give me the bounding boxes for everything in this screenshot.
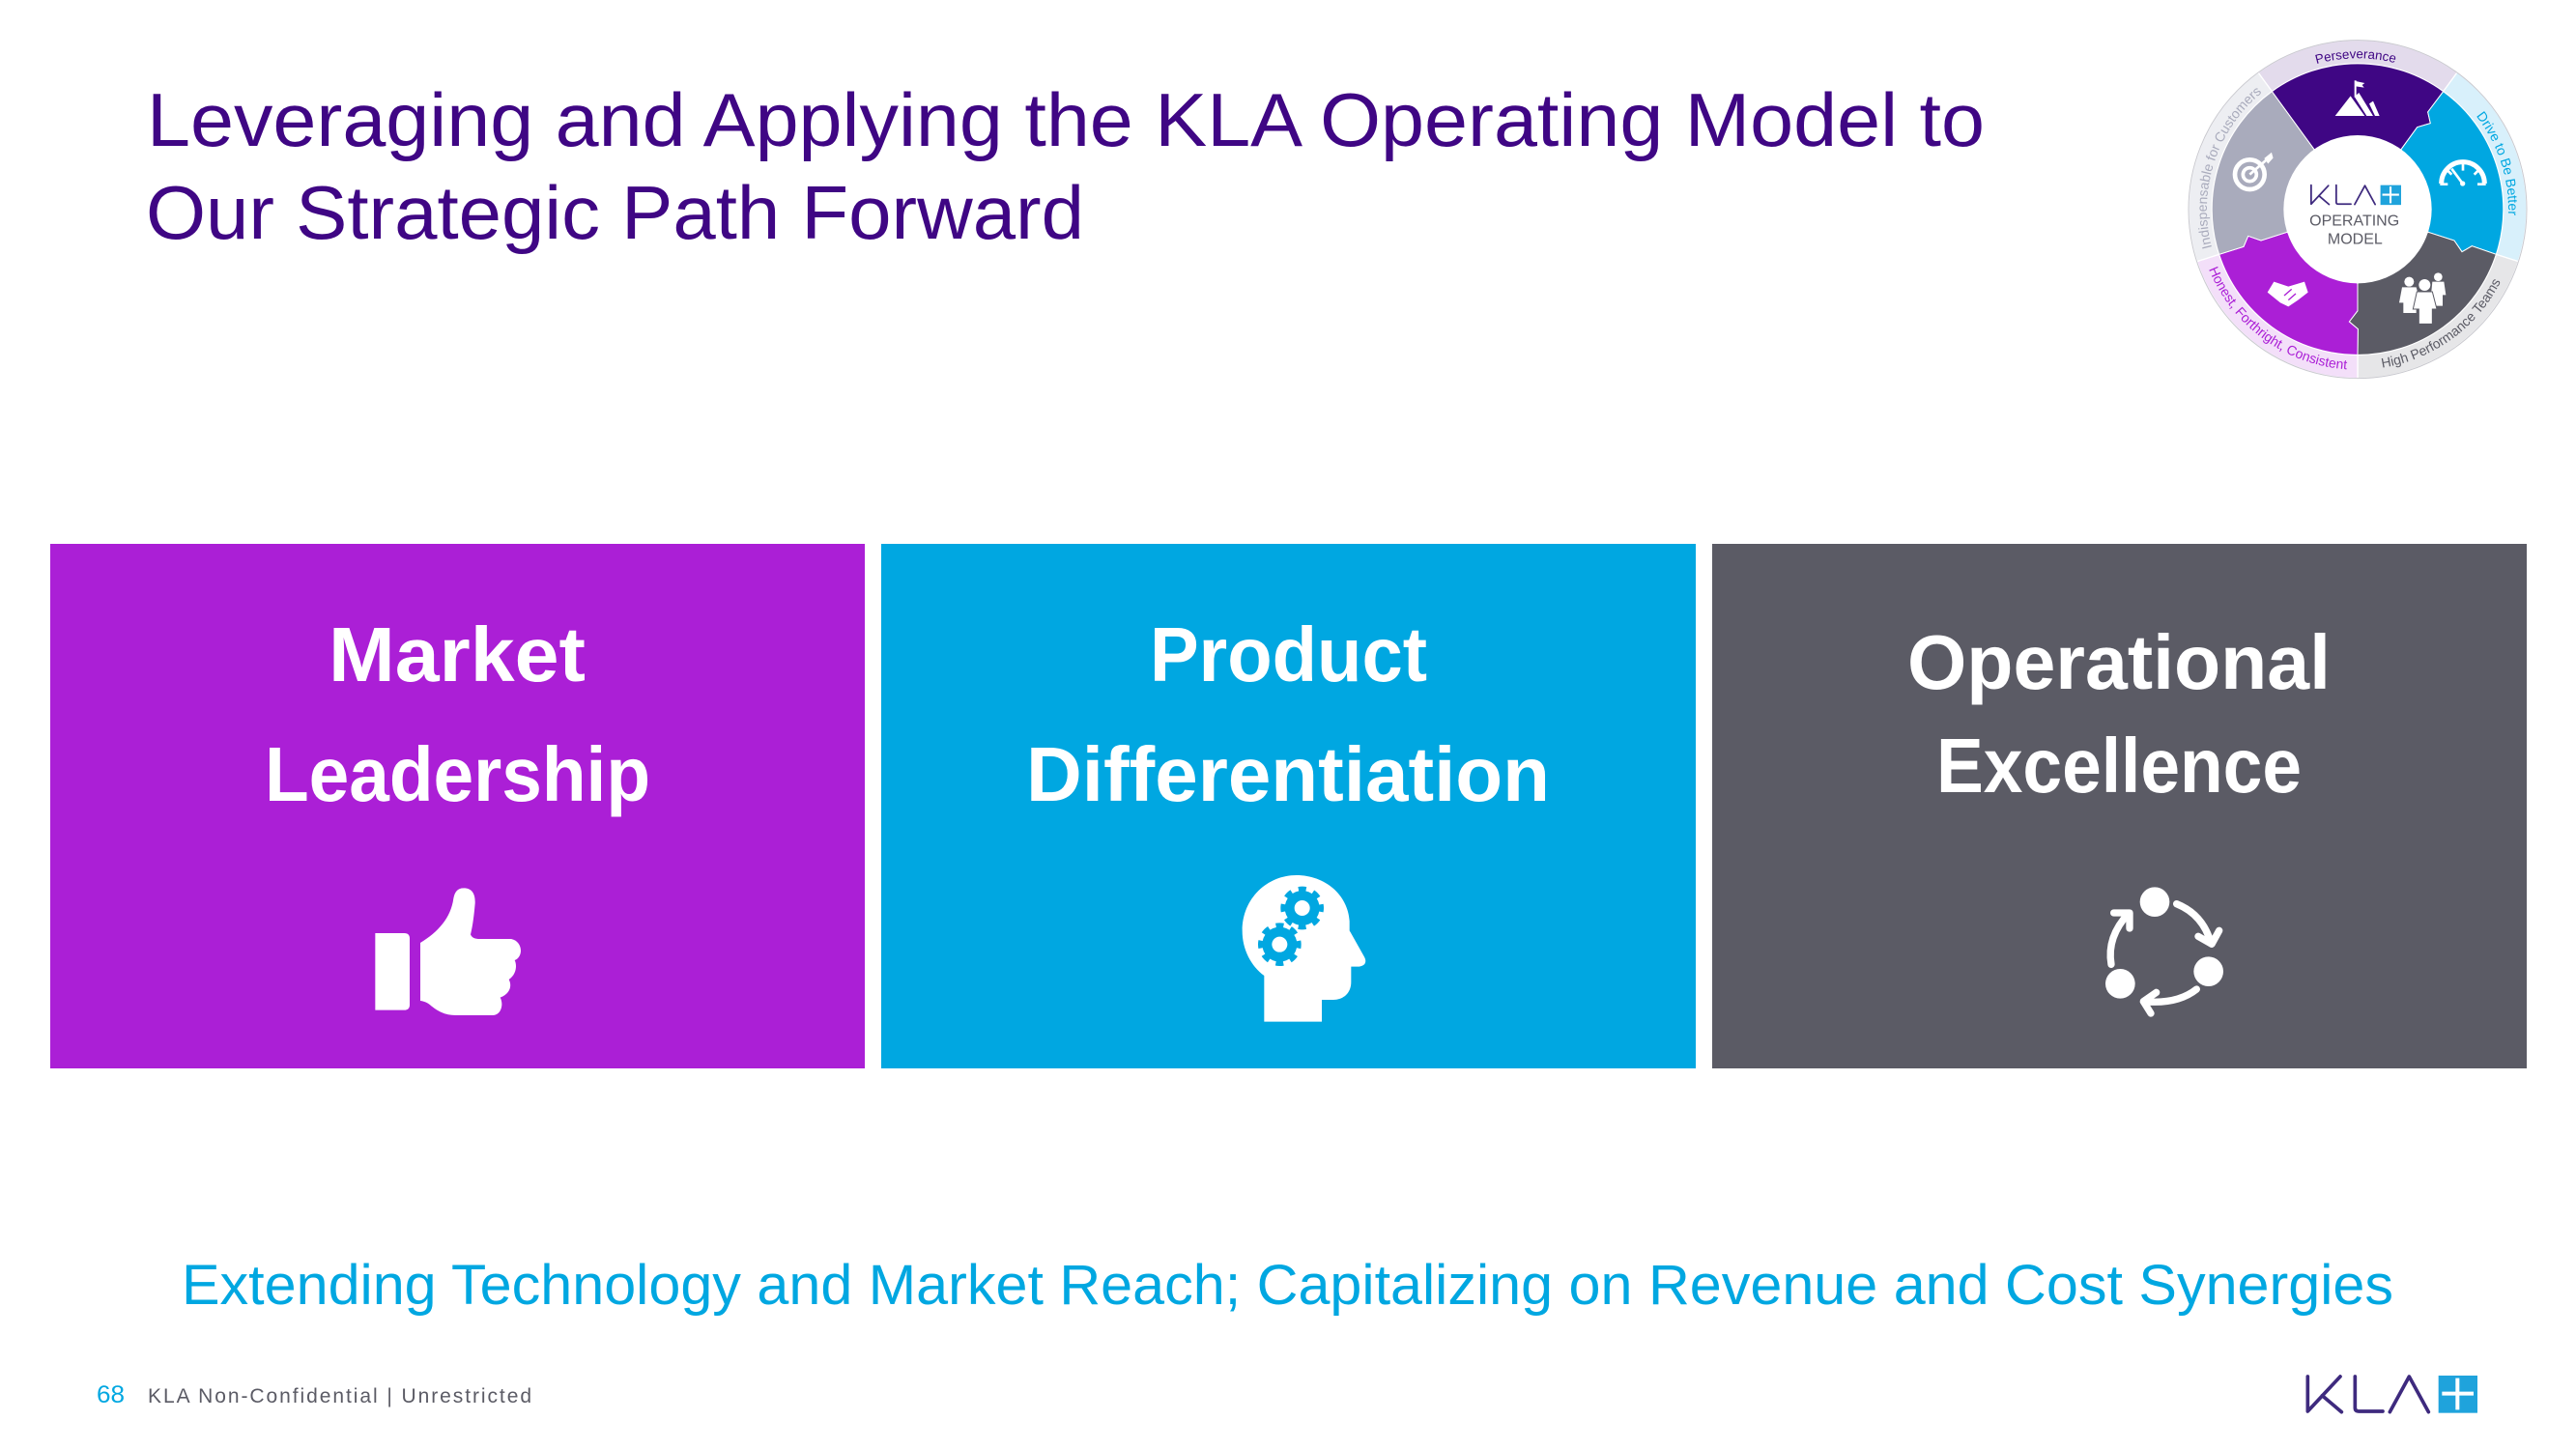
heading: operational excellence: Operational xyxy=(1907,619,2331,705)
title: Our Strategic Path Forward xyxy=(146,170,1084,255)
subtitle: Extending Technology and Market Reach; Capitalizing on Revenue and Cost Synergies xyxy=(182,1254,2393,1317)
page number: 68 xyxy=(97,1381,125,1408)
wheel center text xyxy=(2309,213,2399,248)
heading: operational excellence: Excellence xyxy=(1936,723,2302,809)
wheel center text: MODEL xyxy=(2328,232,2383,248)
icon: people xyxy=(2399,272,2446,324)
logo: KLA xyxy=(2307,1376,2477,1413)
heading: market leadership: Market xyxy=(329,611,586,697)
heading: market leadership xyxy=(265,611,650,817)
icon: gauge xyxy=(2440,162,2486,186)
ring outline xyxy=(2189,41,2527,379)
sector: honest xyxy=(2219,232,2358,355)
wheel center text: OPERATING xyxy=(2309,213,2399,230)
icon: cycle xyxy=(2105,887,2223,1013)
icon: head with gears xyxy=(1243,875,1365,1022)
panel: operational excellence xyxy=(1712,544,2527,1068)
heading: market leadership: Leadership xyxy=(265,731,650,817)
ring: honest forthright consistent xyxy=(2197,254,2358,379)
ring labels xyxy=(2198,51,2517,369)
heading: product differentiation xyxy=(1026,611,1550,817)
title: Leveraging and Applying the KLA Operating Model to xyxy=(147,77,1985,162)
ring: perseverance xyxy=(2258,40,2457,92)
sector: customers xyxy=(2212,92,2314,254)
ring labels: Perseverance xyxy=(2315,51,2396,64)
heading: product differentiation: Differentiation xyxy=(1026,731,1550,817)
title xyxy=(146,77,1985,255)
icon: mountain flag xyxy=(2335,80,2380,116)
icon: target xyxy=(2235,154,2273,189)
panel: product differentiation xyxy=(881,544,1696,1068)
ring labels: Drive to Be Better xyxy=(2476,111,2517,215)
wheel logo xyxy=(2311,185,2401,205)
icon: thumbs up xyxy=(375,888,521,1015)
ring labels: Honest, Forthright, Consistent xyxy=(2209,267,2348,369)
operating model wheel xyxy=(2188,40,2528,379)
ring: drive to be better xyxy=(2444,72,2527,262)
ring labels: Indispensable for Customers xyxy=(2198,88,2261,249)
icon: handshake xyxy=(2268,282,2308,306)
sector: perseverance xyxy=(2272,64,2444,150)
heading: product differentiation: Product xyxy=(1150,611,1427,697)
wheel center xyxy=(2283,135,2432,283)
ring: indispensable for customers xyxy=(2189,72,2272,262)
sector: teams xyxy=(2349,232,2496,355)
sector: drive xyxy=(2401,92,2504,254)
ring labels: High Performance Teams xyxy=(2381,279,2501,367)
heading: operational excellence xyxy=(1907,619,2331,809)
panel: market leadership xyxy=(50,544,865,1068)
ring: high performance teams xyxy=(2358,254,2518,379)
footer classification: KLA Non-Confidential | Unrestricted xyxy=(148,1385,531,1407)
